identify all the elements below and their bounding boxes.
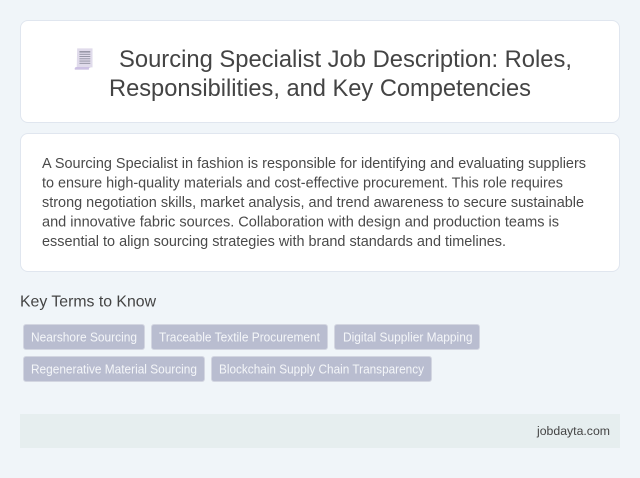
description text: to ensure high-quality materials and cost-effective procurement. This role requires xyxy=(42,176,563,192)
description text: A Sourcing Specialist in fashion is responsible for identifying and evaluating suppliers xyxy=(42,156,586,172)
tag: Traceable Textile Procurement xyxy=(151,324,328,350)
tag: Regenerative Material Sourcing xyxy=(23,356,205,382)
tag: Blockchain Supply Chain Transparency xyxy=(211,356,432,382)
icon: document scroll xyxy=(74,48,92,70)
tag: Blockchain Supply Chain Transparency: Blockchain Supply Chain Transparency xyxy=(219,362,425,376)
tag: Traceable Textile Procurement: Traceable Textile Procurement xyxy=(159,330,320,344)
footer source text: jobdayta.com xyxy=(536,424,610,438)
heading: key terms: Key Terms to Know xyxy=(20,294,156,310)
tag: Nearshore Sourcing: Nearshore Sourcing xyxy=(31,330,137,344)
title text: Sourcing Specialist Job Description: Roles, xyxy=(119,46,572,73)
description text xyxy=(42,156,586,250)
description text: and innovative fabric sources. Collaboration with design and production teams is xyxy=(42,215,559,231)
title text: Responsibilities, and Key Competencies xyxy=(109,75,531,102)
description text: strong negotiation skills, market analysis, and trend awareness to secure sustainable xyxy=(42,195,584,211)
tag: Digital Supplier Mapping: Digital Supplier Mapping xyxy=(343,330,472,344)
footer xyxy=(20,414,620,448)
panel: description xyxy=(20,133,620,272)
tag: Nearshore Sourcing xyxy=(23,324,145,350)
panel: title xyxy=(20,20,620,123)
title text xyxy=(109,46,572,102)
tag: Regenerative Material Sourcing: Regenerative Material Sourcing xyxy=(31,362,197,376)
tag: Digital Supplier Mapping xyxy=(334,324,480,350)
description text: essential to align sourcing strategies with brand standards and timelines. xyxy=(42,234,506,250)
